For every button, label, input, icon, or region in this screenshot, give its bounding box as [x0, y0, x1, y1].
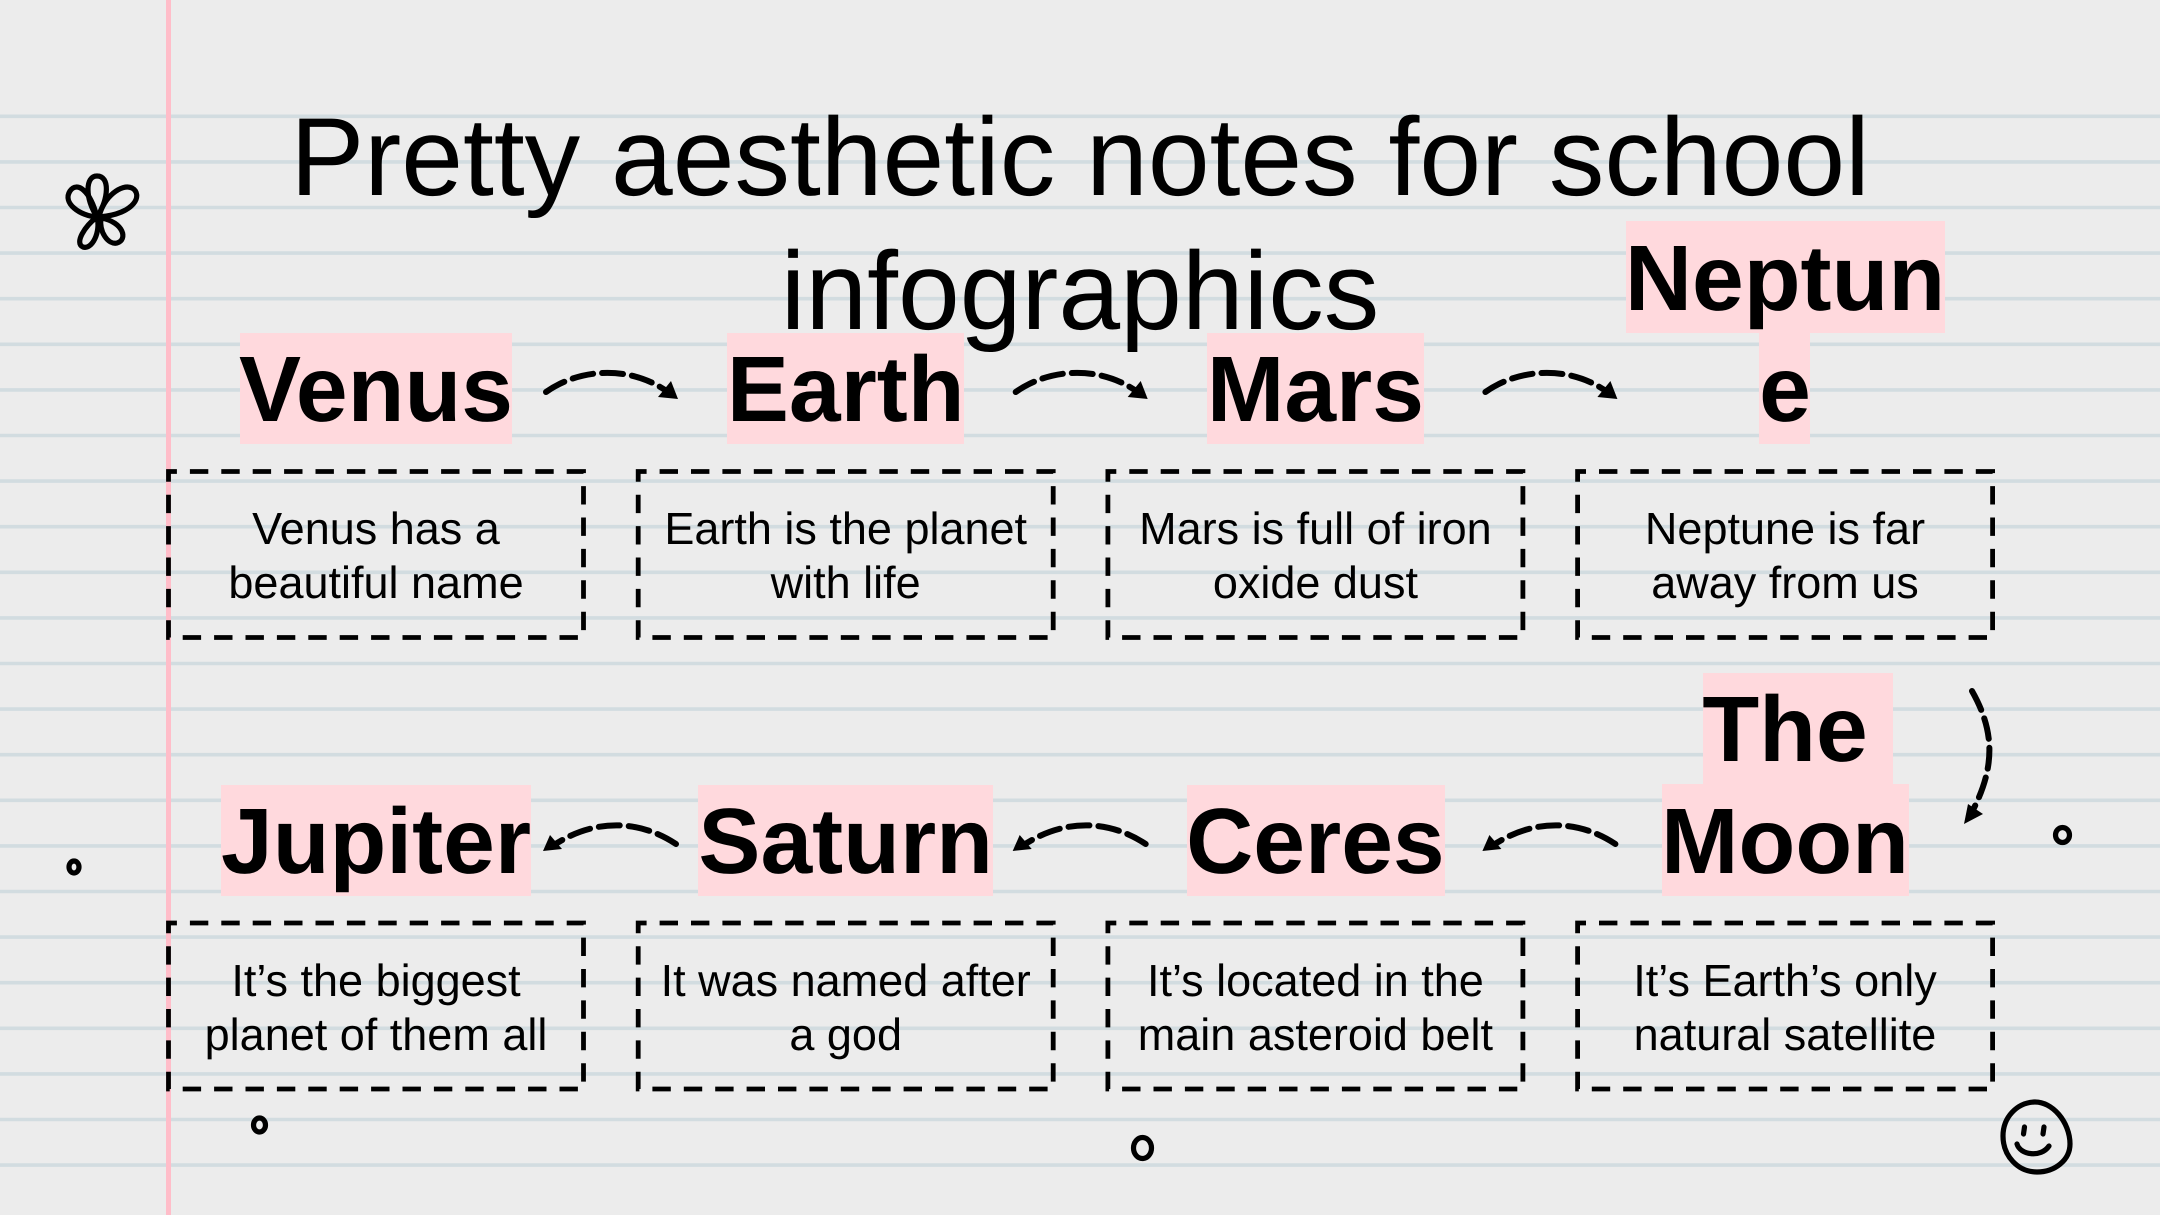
panel: The Moon: The — [1702, 677, 1868, 781]
panel: Mars: Mars — [1207, 337, 1424, 441]
icon: small circle left — [69, 861, 79, 873]
panel: Earth — [638, 333, 1053, 638]
panel: Saturn: Saturn — [698, 789, 993, 893]
panel: The Moon: natural satellite — [1634, 1009, 1936, 1060]
panel: Jupiter — [168, 785, 584, 1089]
title: Pretty aesthetic notes for school — [290, 95, 1870, 219]
panel: Ceres: main asteroid belt — [1138, 1009, 1493, 1060]
panel: Ceres: It’s located in the — [1147, 955, 1484, 1006]
panel: The Moon: Moon — [1661, 789, 1909, 893]
arrow: Earth to Mars — [1016, 373, 1148, 399]
panel: Neptune: Neptune is far — [1645, 503, 1925, 554]
panel: The Moon — [1578, 673, 1993, 1089]
panel: Earth: with life — [770, 557, 921, 608]
panel: Mars: oxide dust — [1213, 557, 1418, 608]
panel: Neptune: e — [1759, 337, 1811, 441]
panel: Mars — [1108, 333, 1523, 638]
panel: Neptune: away from us — [1651, 557, 1919, 608]
arrow: Saturn to Jupiter — [543, 825, 676, 851]
arrow: Venus to Earth — [546, 373, 678, 399]
icon: small circle bottom center — [1134, 1138, 1152, 1158]
panel: Saturn: a god — [789, 1009, 902, 1060]
icon: small circle right — [2056, 828, 2070, 842]
title: infographics — [781, 229, 1379, 353]
panel: Jupiter: Jupiter — [221, 789, 531, 893]
panel: Venus: Venus has a — [252, 503, 501, 554]
panel: Venus — [168, 333, 584, 638]
panel: Earth: Earth is the planet — [664, 503, 1028, 554]
panel: Saturn: It was named after — [661, 955, 1031, 1006]
arrow: Ceres to Saturn — [1013, 825, 1146, 851]
panel: Ceres: Ceres — [1186, 789, 1445, 893]
panel: Jupiter: It’s the biggest — [231, 955, 521, 1006]
panel: Venus: beautiful name — [228, 557, 524, 608]
panel: Neptune — [1578, 221, 1993, 638]
icon: smiley face — [2003, 1102, 2070, 1172]
panel: Venus: Venus — [239, 337, 513, 441]
arrow: Neptune to The Moon — [1964, 691, 1989, 824]
arrow: Mars to Neptune — [1485, 373, 1617, 399]
panel: Ceres — [1108, 785, 1523, 1089]
panel: Earth: Earth — [727, 337, 965, 441]
icon: small circle bottom left — [254, 1118, 266, 1132]
panel: Saturn — [638, 785, 1053, 1089]
panel: Jupiter: planet of them all — [205, 1009, 547, 1060]
panel: Mars: Mars is full of iron — [1139, 503, 1492, 554]
panel: The Moon: It’s Earth’s only — [1633, 955, 1937, 1006]
icon: flower doodle — [68, 176, 137, 247]
panel: Neptune: Neptun — [1625, 226, 1945, 330]
title — [290, 95, 1870, 353]
arrow: The Moon to Ceres — [1482, 825, 1615, 851]
